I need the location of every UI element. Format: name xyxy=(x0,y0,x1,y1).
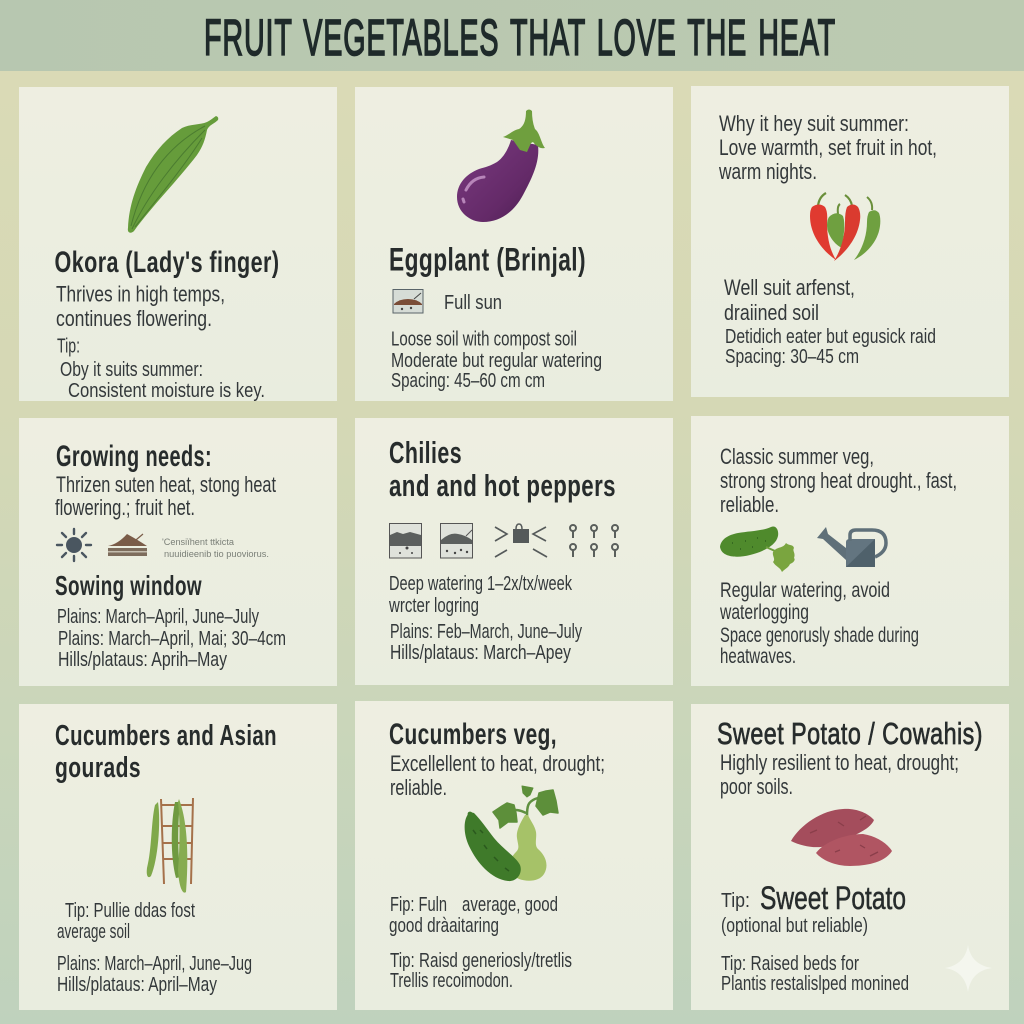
text: watering and spacing: Regular watering, avoid xyxy=(720,579,890,602)
text: cucumber tip xyxy=(389,894,558,937)
text: sowing dates: Plains: March–April, June–July xyxy=(57,606,259,628)
icon: sweet potatoes xyxy=(791,809,892,866)
panel: okra xyxy=(19,87,337,402)
text: trellis tip: Trellis recoimodon. xyxy=(390,970,513,992)
icon: soil box one xyxy=(390,524,422,558)
heading: eggplant: Eggplant (Brinjal) xyxy=(389,242,586,278)
text: why they suit summer xyxy=(718,111,937,184)
panel: sweet potato xyxy=(691,704,1009,1010)
text: sowing dates xyxy=(57,606,286,671)
text: eggplant growing notes: Spacing: 45–60 cm cm xyxy=(391,370,545,392)
text: gourd sowing dates: Plains: March–April, June–Jug xyxy=(57,953,252,975)
text: chili watering: Deep watering 1–2x/tx/week xyxy=(389,573,573,595)
text: raised beds tip: Plantis restalislped monined xyxy=(721,973,909,995)
text: chili sowing dates xyxy=(390,621,582,664)
text: cucumber tip: good dràaitaring xyxy=(389,915,499,937)
text: sweet potato tip: Tip: xyxy=(721,890,750,912)
text: chili watering xyxy=(388,573,573,617)
panel: classic summer veg xyxy=(691,416,1009,686)
text: raised beds tip xyxy=(721,953,909,995)
text: watering and spacing xyxy=(719,579,919,668)
text: classic summer veg: reliable. xyxy=(720,492,779,517)
text: eggplant growing notes: Loose soil with compost soil xyxy=(391,328,577,350)
text: eggplant growing notes xyxy=(391,328,602,392)
text: sowing dates: Plains: March–April, Mai; 30–4cm xyxy=(58,628,286,650)
text: cucumbers description: reliable. xyxy=(390,775,447,800)
panel: eggplant xyxy=(355,87,673,401)
icon: sun xyxy=(57,529,91,561)
text: chili sowing dates: Plains: Feb–March, June–July xyxy=(390,621,582,643)
text: cucumber tip: Fip: Fuln xyxy=(390,894,447,916)
icon: cucumber and gourd with leaves xyxy=(465,786,558,881)
text: okra description xyxy=(56,282,225,331)
text: soil and spacing: draiined soil xyxy=(724,300,819,325)
text: growing needs description xyxy=(55,472,277,520)
icon: sparkle xyxy=(945,945,992,992)
text: okra description: continues flowering. xyxy=(56,306,212,331)
icon: watering can xyxy=(817,527,886,567)
panel: growing needs xyxy=(19,418,337,686)
icon: okra xyxy=(128,116,218,233)
panel: why they suit summer xyxy=(691,86,1009,397)
text: soil and spacing: Well suit arfenst, xyxy=(724,275,855,300)
icon: spacing pegs xyxy=(570,525,618,557)
text: cucumbers description xyxy=(390,751,605,800)
text: sowing dates: Hills/plataus: Aprih–May xyxy=(58,649,227,671)
heading: growing needs: Growing needs: xyxy=(56,440,212,473)
header band xyxy=(0,0,1024,71)
icon: eggplant xyxy=(457,110,545,222)
heading: chilies and hot peppers: Chilies xyxy=(389,435,462,470)
heading: cucumbers and Asian gourds: gourads xyxy=(55,752,141,784)
text: why they suit summer: Love warmth, set fruit in hot, xyxy=(719,135,937,160)
text: okra tip: Tip: xyxy=(57,336,80,358)
heading: sowing window: Sowing window xyxy=(55,570,202,601)
text: okra tip: Consistent moisture is key. xyxy=(68,380,265,402)
text: soil and spacing xyxy=(724,275,936,368)
text: raised beds tip: Tip: Raised beds for xyxy=(721,953,859,975)
text: sweet potato description xyxy=(720,750,959,799)
text: gourd sowing dates xyxy=(57,953,252,996)
label: full sun: Full sun xyxy=(444,292,502,314)
text: gourd sowing dates: Hills/plataus: April–May xyxy=(57,974,217,996)
text: trellis tip: Tip: Raisd generiosly/tretlis xyxy=(390,950,572,972)
text: sweet potato tip: Sweet Potato xyxy=(760,880,906,916)
text: watering and spacing: waterlogging xyxy=(719,601,809,624)
caption: small note xyxy=(162,537,269,559)
text: why they suit summer: warm nights. xyxy=(718,159,817,184)
text: cucumber tip: average, good xyxy=(462,894,558,916)
icon: chili peppers xyxy=(810,193,880,261)
text: chili watering: wrcter logring xyxy=(388,595,479,617)
text: sweet potato tip xyxy=(721,880,906,937)
panel: chilies and hot peppers xyxy=(355,418,673,685)
text: soil and spacing: Spacing: 30–45 cm xyxy=(725,346,859,368)
panel: cucumbers veg xyxy=(355,701,673,1010)
icon: watering diagram xyxy=(495,524,547,557)
icon: soil mound xyxy=(108,534,147,556)
heading: cucumbers veg: Cucumbers veg, xyxy=(389,718,557,751)
caption: small note: 'Censiïhent ttkicta xyxy=(162,537,234,547)
caption: small note: nuuidieenib tio puoviorus. xyxy=(164,549,269,559)
text: gourd tip xyxy=(57,900,195,943)
text: okra tip xyxy=(57,336,265,402)
icon: soil box xyxy=(393,290,423,313)
heading: chilies and hot peppers: and and hot peppers xyxy=(389,468,616,503)
text: gourd tip: average soil xyxy=(57,921,130,943)
heading: cucumbers and Asian gourds xyxy=(55,720,277,784)
text: growing needs description: flowering.; fruit het. xyxy=(55,495,195,520)
icon: cucumber with leaf xyxy=(720,527,795,572)
text: why they suit summer: Why it hey suit summer: xyxy=(719,111,909,136)
heading: cucumbers and Asian gourds: Cucumbers and Asian xyxy=(55,720,277,752)
text: okra tip: Oby it suits summer: xyxy=(60,359,203,381)
text: watering and spacing: Space genorusly shade during xyxy=(720,624,919,647)
heading: chilies and hot peppers xyxy=(389,435,616,503)
icon: soil box two xyxy=(440,524,472,558)
text: classic summer veg xyxy=(720,444,957,517)
text: sweet potato description: poor soils. xyxy=(720,774,793,799)
heading: okra: Okora (Lady's finger) xyxy=(54,246,280,279)
icon: trellis with gourds xyxy=(147,798,193,893)
panel: cucumbers and Asian gourds xyxy=(19,704,337,1010)
text: cucumbers description: Excellellent to heat, drought; xyxy=(390,751,605,776)
text: gourd tip: Tip: Pullie ddas fost xyxy=(65,900,195,922)
text: eggplant growing notes: Moderate but regular watering xyxy=(391,350,602,372)
text: classic summer veg: Classic summer veg, xyxy=(720,444,874,469)
text: okra description: Thrives in high temps, xyxy=(56,282,225,306)
text: sweet potato tip: (optional but reliable) xyxy=(721,915,868,937)
text: chili sowing dates: Hills/plataus: March–Apey xyxy=(390,642,571,664)
text: soil and spacing: Detidich eater but egusick raid xyxy=(725,326,936,348)
text: trellis tip xyxy=(390,950,572,992)
text: watering and spacing: heatwaves. xyxy=(720,645,796,668)
text: growing needs description: Thrizen suten heat, stong heat xyxy=(56,472,277,497)
